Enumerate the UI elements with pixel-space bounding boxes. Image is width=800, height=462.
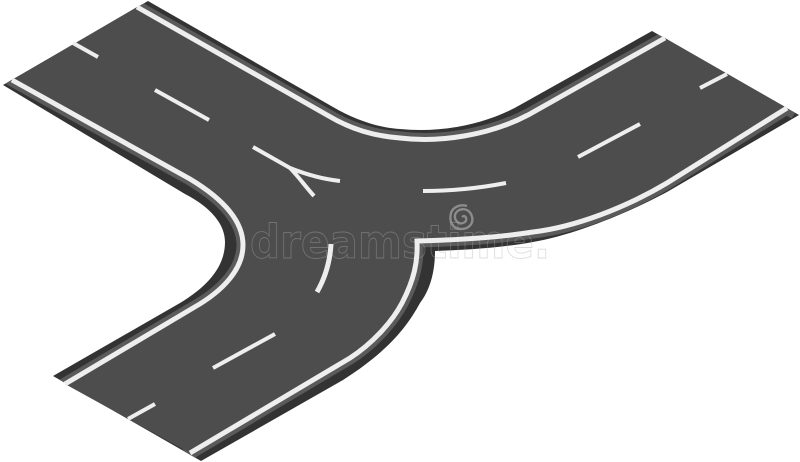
dash: right branch bbox=[578, 124, 640, 157]
dash: lower branch bbox=[213, 334, 275, 368]
curved dash: right lane bbox=[423, 183, 506, 191]
watermark: wordmark: dreamstime. bbox=[250, 215, 550, 269]
merge arrow marking bbox=[253, 147, 340, 196]
stop stub: upper left bbox=[73, 43, 98, 57]
watermark: spiral logo bbox=[450, 205, 472, 229]
stop stub: lower bbox=[128, 404, 155, 419]
edge line: left branch curve bbox=[12, 80, 243, 384]
curved dash: lower lane bbox=[317, 244, 331, 292]
edge line: upper bbox=[137, 7, 665, 139]
lane markings bbox=[73, 43, 727, 419]
dash: upper left bbox=[155, 90, 209, 120]
stop stub: right bbox=[700, 74, 727, 88]
edge line: right branch lower and inner corner bbox=[190, 108, 787, 453]
